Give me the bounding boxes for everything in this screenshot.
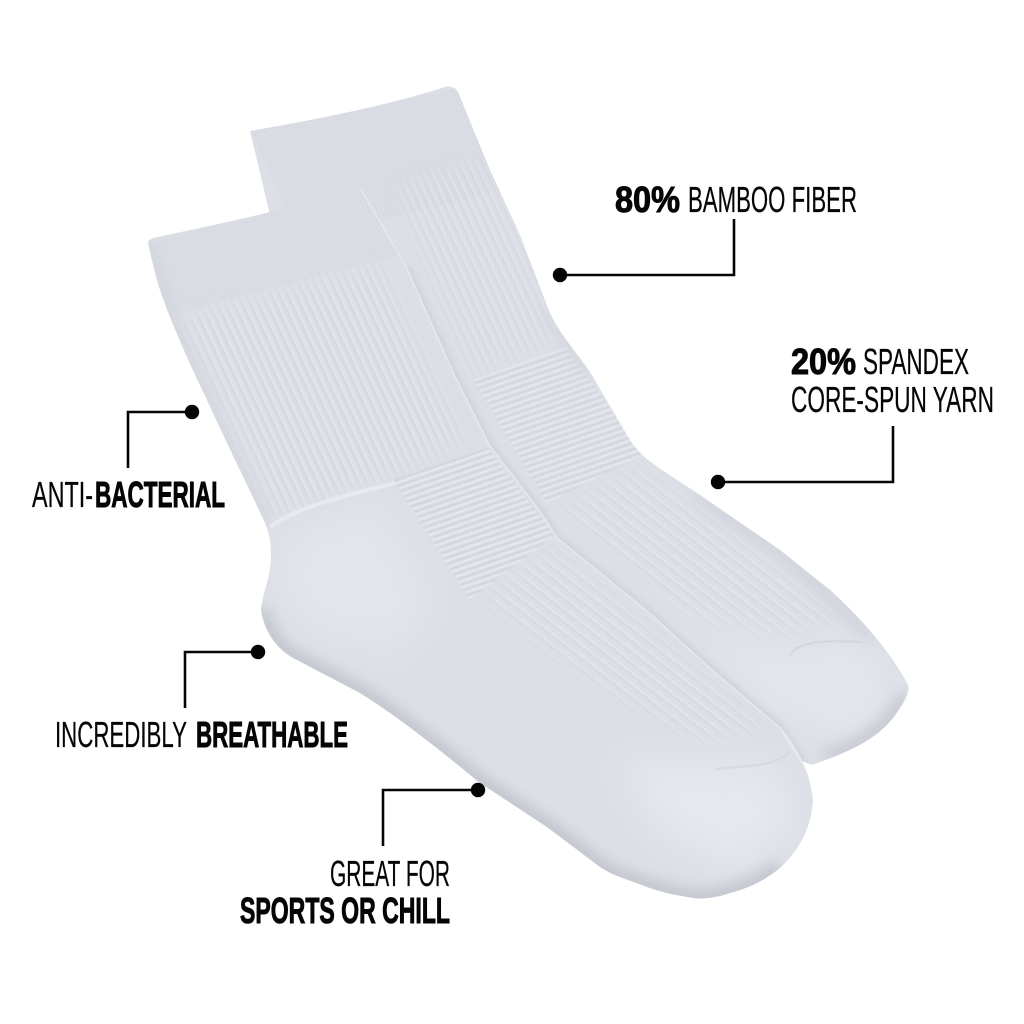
callout: incredibly breathable (55, 645, 348, 755)
callout: great for sports or chill: SPORTS OR CHILL (240, 890, 450, 931)
callout: 80% bamboo fiber: BAMBOO FIBER (688, 179, 857, 220)
back sock (250, 87, 908, 765)
callout: anti-bacterial: BACTERIAL (95, 474, 225, 515)
callout: great for sports or chill (240, 783, 485, 931)
callout: 20% spandex core-spun yarn (711, 341, 994, 489)
illustration: pair of white socks (148, 87, 908, 898)
callout: 80% bamboo fiber: 80% (615, 179, 680, 220)
callout: 80% bamboo fiber (553, 179, 857, 282)
front sock (148, 185, 813, 898)
callout: great for sports or chill: GREAT FOR (330, 853, 450, 894)
callout: anti-bacterial: ANTI- (32, 474, 93, 515)
callout: incredibly breathable: BREATHABLE (196, 714, 348, 755)
callout: anti-bacterial (32, 405, 225, 515)
callout: 20% spandex core-spun yarn: 20% (791, 341, 856, 382)
callout: incredibly breathable: INCREDIBLY (55, 714, 187, 755)
